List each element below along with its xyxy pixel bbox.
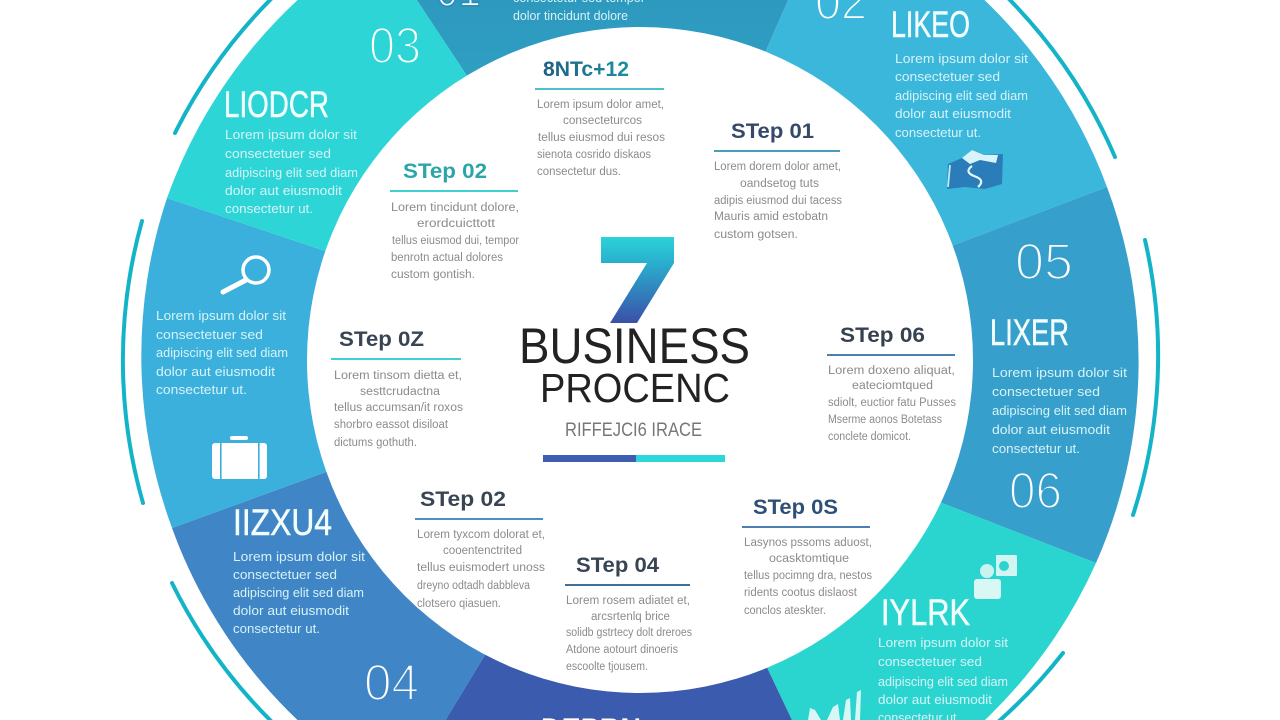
step body: Lorem tincidunt dolore, [391, 202, 519, 214]
step body: Mauris amid estobatn [714, 211, 828, 223]
big number 7 [601, 237, 674, 323]
step body: sienota cosrido diskaos [537, 149, 651, 161]
body text: Lorem ipsum dolor sit [878, 636, 1009, 650]
heading: LIODCR [224, 84, 329, 125]
subtitle: RIFFEJCI6 IRACE [565, 420, 702, 441]
body text: Lorem ipsum dolor sit [225, 128, 358, 142]
number 05: 05 [1015, 233, 1073, 290]
step card: step 03 [742, 496, 872, 617]
body text: adipiscing elit sed diam [225, 166, 358, 180]
step card: step 04 [565, 554, 692, 673]
segment: top 01 [377, 0, 832, 85]
step body: Lorem rosem adiatet et, [566, 595, 690, 607]
body text: consectetuer sed [878, 655, 982, 669]
step body: custom gontish. [391, 269, 475, 281]
step title: STep 02 [403, 160, 487, 183]
step body: ridents cootus dislaost [744, 587, 858, 599]
body text: consectetuer sed [895, 70, 1000, 84]
step title: STep 0S [753, 496, 838, 519]
body text: consectetuer sed [156, 328, 263, 342]
heading: IIZXU4 [233, 502, 332, 543]
segment: bottom dark blue [400, 645, 838, 720]
icon: rising chart [808, 690, 861, 720]
step title: 8NTc+12 [543, 58, 629, 81]
number 04: 04 [364, 654, 419, 711]
step body: consectetur dus. [537, 166, 621, 178]
step card: top [535, 58, 665, 178]
step title: STep 06 [840, 324, 925, 347]
step body: tellus pocimng dra, nestos [744, 570, 872, 582]
step title: STep 0Z [339, 328, 424, 351]
segment: right 05 [929, 187, 1139, 563]
step body: tellus euismodert unoss [417, 562, 545, 574]
step body: dreyno odtadh dabbleva [417, 580, 531, 592]
body text [895, 52, 1029, 140]
step body: solidb gstrtecy dolt dreroes [566, 627, 692, 639]
body text: Lorem ipsum dolor sit [233, 550, 366, 564]
body text [156, 309, 288, 397]
step body: cooentenctrited [443, 545, 522, 557]
step body [391, 202, 519, 281]
step body: Lorem ipsum dolor amet, [537, 99, 664, 111]
icon: magnifying glass [223, 257, 269, 292]
panel: lower right segment text [808, 555, 1017, 720]
step body: dictums gothuth. [334, 437, 417, 449]
step body: oandsetog tuts [740, 178, 819, 190]
segment: upper left 03 [167, 0, 473, 255]
step body: sesttcrudactna [360, 386, 441, 398]
panel: top segment text [513, 0, 645, 23]
body text: consectetur ut. [225, 202, 313, 216]
step title: STep 04 [576, 554, 659, 577]
step body: erordcuicttott [417, 218, 496, 230]
step body [714, 161, 842, 241]
step body: tellus accumsan/it roxos [334, 402, 463, 414]
step title: STep 01 [731, 120, 814, 143]
step body: custom gotsen. [714, 229, 798, 241]
process ring segments [141, 0, 1139, 720]
step card: left step 02 [331, 328, 463, 449]
step body: Mserme aonos Botetass [828, 414, 942, 426]
step body: Lasynos pssoms aduost, [744, 537, 872, 549]
segment: left light blue [141, 198, 337, 528]
body text: adipiscing elit sed diam [878, 675, 1008, 689]
body text [233, 550, 366, 636]
step body: tellus eiusmod dui resos [538, 132, 665, 144]
body text: consectetur ut. [992, 442, 1080, 456]
step body: shorbro eassot disiloat [334, 419, 449, 431]
panel: left segment text [156, 257, 288, 479]
step body [334, 370, 463, 449]
step body: ocasktomtique [769, 553, 849, 565]
step body: arcsrtenlq brice [591, 611, 670, 623]
body text [878, 636, 1009, 720]
accent bar [543, 455, 725, 462]
step body: conclete domicot. [828, 431, 911, 443]
segment: lower right teal [762, 498, 1096, 720]
body text [992, 366, 1128, 456]
step body [566, 595, 692, 673]
icon: handshake [947, 150, 1003, 189]
step body: tellus eiusmod dui, tempor [392, 235, 519, 247]
step body: Lorem tinsom dietta et, [334, 370, 462, 382]
body text: consectetur ut. [233, 622, 320, 636]
body text: dolor aut eiusmodit [225, 184, 343, 198]
step title: STep 02 [420, 488, 506, 511]
icon: briefcase [212, 436, 267, 479]
step body: Lorem tyxcom dolorat et, [417, 529, 545, 541]
panel: right segment text [990, 312, 1128, 456]
number 03: 03 [369, 17, 421, 74]
body text: dolor aut eiusmodit [992, 423, 1111, 437]
body text: consectetuer sed [225, 147, 331, 161]
panel: upper left segment text [224, 84, 358, 216]
body text: dolor aut eiusmodit [233, 604, 350, 618]
step body: consecteturcos [563, 115, 642, 127]
step body: Lorem dorem dolor amet, [714, 161, 841, 173]
panel: central title [519, 237, 750, 462]
body text: adipiscing elit sed diam [156, 346, 288, 360]
body text: Lorem ipsum dolor sit [992, 366, 1128, 380]
body text: Lorem ipsum dolor sit [895, 52, 1029, 66]
step body: eateciomtqued [852, 380, 933, 392]
step body: Lorem doxeno aliquat, [828, 365, 955, 377]
body text: adipiscing elit sed diam [233, 586, 364, 600]
panel: lower left segment text [233, 502, 366, 636]
step card: step 01 [714, 120, 842, 241]
step body: conclos ateskter. [744, 605, 826, 617]
body text: adipiscing elit sed diam [895, 89, 1028, 103]
title: business: BUSINESS [519, 318, 750, 374]
body text: dolor aut eiusmodit [156, 365, 276, 379]
body text: consectetur ut. [895, 126, 981, 140]
heading: IYLRK [881, 592, 970, 633]
panel: top segment text: dolor tincidunt dolore [513, 9, 628, 23]
body text: dolor aut eiusmodit [895, 107, 1012, 121]
step body: benrotn actual dolores [391, 252, 503, 264]
body text: consectetur ut. [156, 383, 247, 397]
body text: consectetuer sed [992, 385, 1100, 399]
step card: bottom left step 02 [415, 488, 545, 610]
step body: clotsero qiasuen. [417, 598, 501, 610]
central white circle [307, 27, 973, 693]
title: process: PROCENC [540, 365, 730, 411]
step body: Atdone aotourt dinoeris [566, 644, 678, 656]
icon: connected blocks [974, 555, 1017, 599]
segment: upper right 02 [761, 0, 1107, 250]
panel: upper right segment text [891, 4, 1029, 189]
step body: escoolte tjousem. [566, 661, 648, 673]
step body [537, 99, 665, 178]
body text [225, 128, 358, 216]
step body [744, 537, 872, 617]
step body [417, 529, 545, 610]
segment: lower left 04 [172, 468, 491, 720]
body text: Lorem ipsum dolor sit [156, 309, 287, 323]
body text: dolor aut eiusmodit [878, 693, 993, 707]
heading: LIKEO [891, 4, 970, 45]
step body [828, 365, 956, 443]
number 06: 06 [1009, 462, 1062, 519]
body text: adipiscing elit sed diam [992, 404, 1127, 418]
step card: teal step 02 [390, 160, 519, 281]
step card: step 06 [827, 324, 956, 443]
step body: sdiolt, euctior fatu Pusses [828, 397, 956, 409]
body text: consectetuer sed [233, 568, 337, 582]
heading: LIXER [990, 312, 1069, 353]
step body: adipis eiusmod dui tacess [714, 195, 842, 207]
